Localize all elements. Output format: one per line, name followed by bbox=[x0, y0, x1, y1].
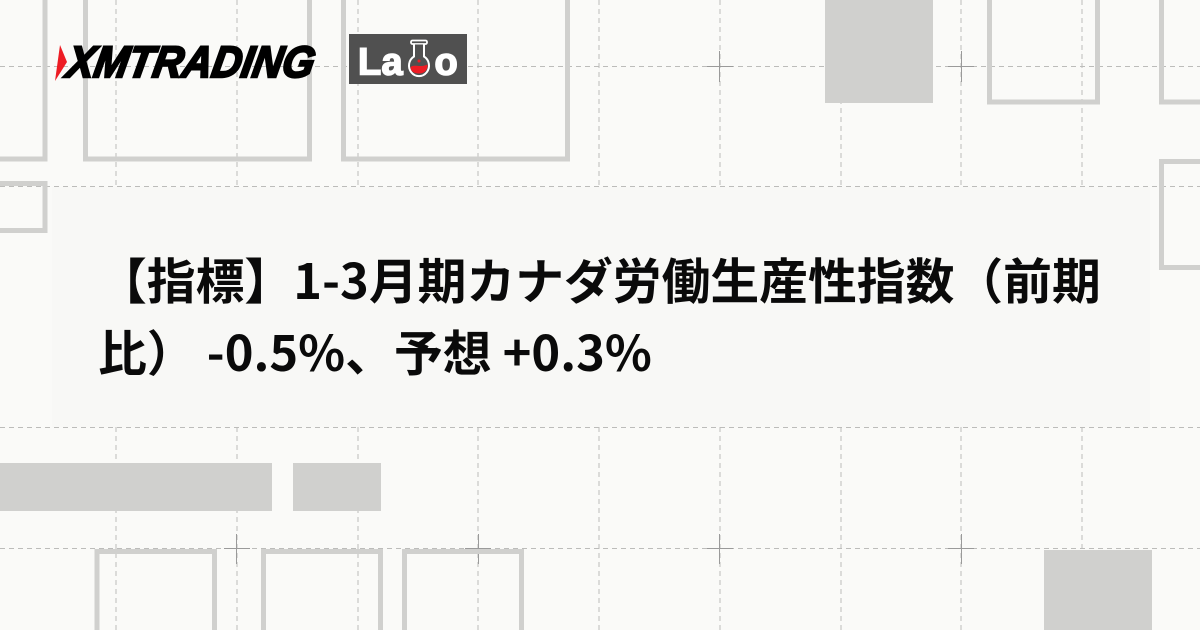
logo: XMTRADING: XMTRADING bbox=[61, 38, 319, 87]
panel: title background bbox=[52, 187, 1150, 427]
title: 【指標】1-3月期カナダ労働生産性指数（前期比） -0.5%、予想 +0.3% bbox=[98, 243, 1101, 386]
logo: Labo bbox=[349, 34, 467, 84]
logo: Labo: a bbox=[382, 42, 404, 84]
logo: Labo: o bbox=[434, 42, 458, 84]
icon: flask bbox=[409, 40, 429, 76]
logo: Labo: L bbox=[358, 42, 381, 84]
